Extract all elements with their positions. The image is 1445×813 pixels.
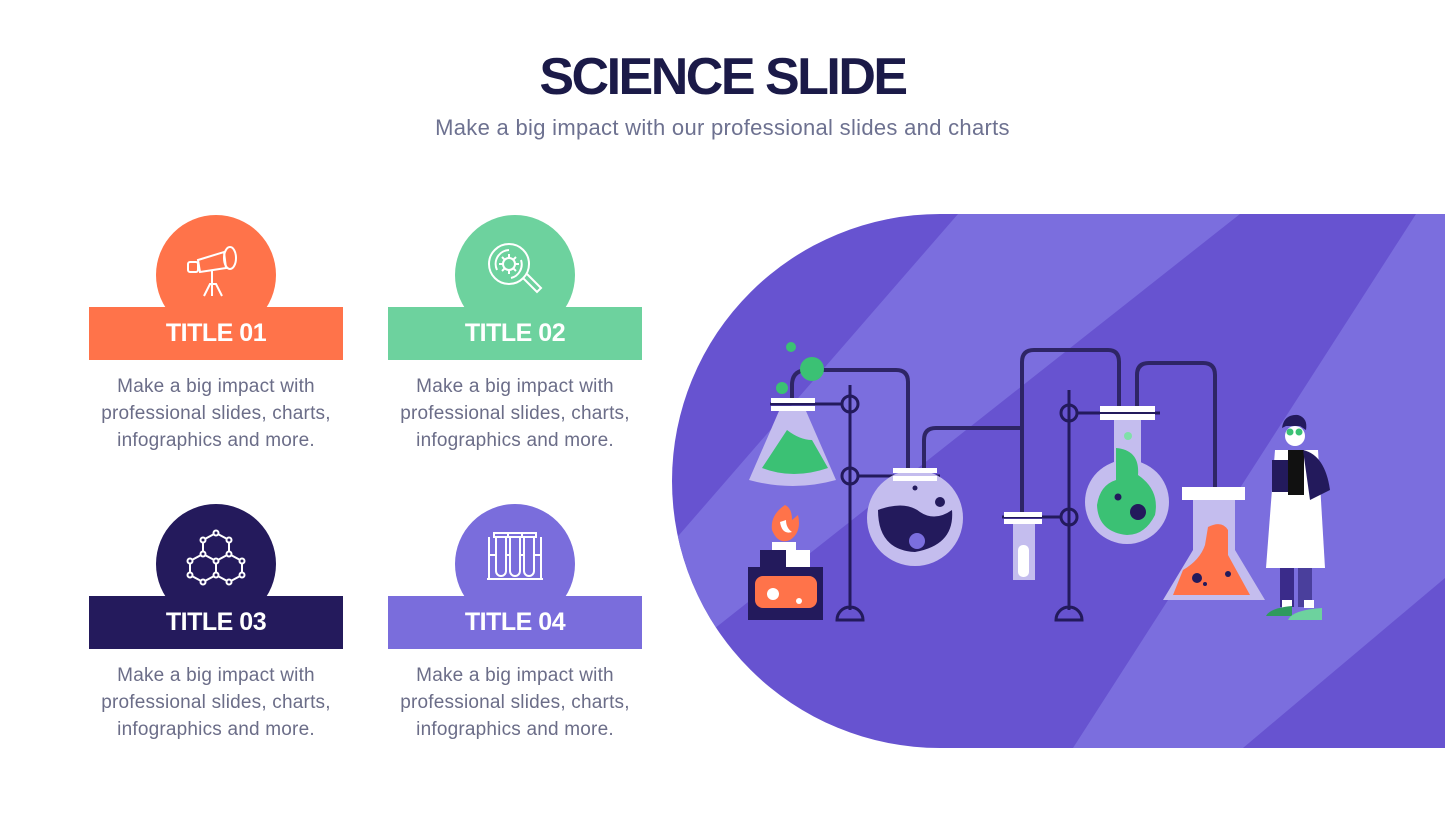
tubes (792, 350, 1215, 518)
title bar (89, 596, 343, 649)
title bar (388, 307, 642, 360)
icon: molecule (156, 504, 276, 624)
round flask dark (867, 468, 963, 566)
icon: magnifier (455, 215, 575, 335)
test tube (1004, 512, 1042, 580)
burner (748, 505, 823, 620)
stands (770, 385, 1160, 620)
title bar (89, 307, 343, 360)
text: Make a big impact with professional slides, charts, infographics and more. (400, 665, 630, 740)
subtitle: Make a big impact with our professional slides and charts (435, 115, 1010, 140)
icon: test tubes (455, 504, 575, 624)
conical flask green (749, 342, 836, 486)
text: Make a big impact with professional slides, charts, infographics and more. (101, 376, 331, 451)
card 02 (388, 215, 642, 451)
card 03 (89, 504, 343, 740)
card 04 (388, 504, 642, 740)
title bar: TITLE 03 (166, 608, 266, 636)
title bar (388, 596, 642, 649)
text: Make a big impact with professional slides, charts, infographics and more. (101, 665, 331, 740)
title bar: TITLE 04 (465, 608, 565, 636)
round flask green (1085, 406, 1169, 544)
erlenmeyer orange (1163, 487, 1265, 600)
title: SCIENCE SLIDE (539, 48, 906, 106)
icon: telescope (156, 215, 276, 335)
text: Make a big impact with professional slides, charts, infographics and more. (400, 376, 630, 451)
title bar: TITLE 01 (166, 319, 266, 347)
card 01 (89, 215, 343, 451)
title bar: TITLE 02 (465, 319, 565, 347)
scientist (1266, 415, 1330, 620)
panel: lab illustration (672, 214, 1445, 748)
